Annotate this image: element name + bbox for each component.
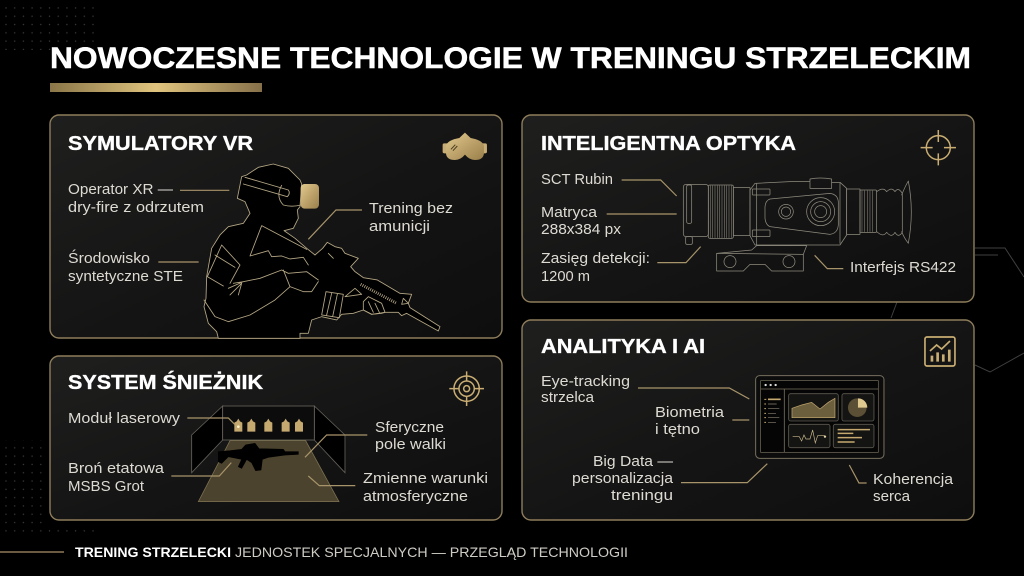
panel: symulatory VR xyxy=(50,115,502,338)
body xyxy=(750,178,847,245)
callout: Zmienne warunki atmosferyczne xyxy=(308,470,488,505)
callout: Zasięg detekcji: 1200 m xyxy=(541,268,590,285)
footer text: JEDNOSTEK SPECJALNYCH — PRZEGLĄD TECHNOLOGII xyxy=(235,544,628,560)
callout: Trening bez amunicji: Trening bez xyxy=(369,200,453,217)
callout: Zasięg detekcji: Zasięg detekcji: xyxy=(541,250,650,267)
callout: Broń etatowa MSBS Grot: MSBS Grot xyxy=(68,478,145,495)
callout: Moduł laserowy: Moduł laserowy xyxy=(68,410,181,427)
rifle silhouette xyxy=(218,443,298,471)
heartbeat xyxy=(793,430,825,443)
callout: Matryca: 288x384 px xyxy=(541,221,622,238)
icon: target xyxy=(449,371,484,406)
callout: SCT Rubin xyxy=(541,171,677,196)
eyepiece xyxy=(847,189,860,234)
callout: Big Data personalizacja treningu: Big Data — xyxy=(593,453,673,470)
callout: Zmienne warunki atmosferyczne: Zmienne warunki xyxy=(363,470,488,487)
callout: Matryca: Matryca xyxy=(541,204,598,221)
title: NOWOCZESNE TECHNOLOGIE W TRENINGU STRZELECKIM xyxy=(50,42,971,75)
callout: Eye-tracking strzelca: Eye-tracking xyxy=(541,373,630,390)
callout: Trening bez amunicji: amunicji xyxy=(369,218,430,235)
objective xyxy=(683,184,708,237)
thermal scope drawing xyxy=(683,178,911,271)
callout: Trening bez amunicji xyxy=(308,200,453,239)
soldier outline with rifle xyxy=(204,164,440,338)
callout: Biometria i tętno xyxy=(655,404,749,438)
pie chart xyxy=(848,398,867,417)
callout: Interfejs RS422 xyxy=(815,255,956,276)
callout: Koherencja serca: Koherencja xyxy=(873,471,954,488)
walls xyxy=(192,406,345,473)
callout: Zasięg detekcji xyxy=(541,247,701,285)
sidebar menu xyxy=(768,397,781,402)
callout: Operator XR: Operator XR — xyxy=(68,181,173,198)
callout: Broń etatowa MSBS Grot: Broń etatowa xyxy=(68,460,165,477)
callout: Sferyczne pole walki xyxy=(305,419,446,457)
heading: system Śnieżnik: SYSTEM ŚNIEŻNIK xyxy=(68,370,263,394)
icon: chart xyxy=(925,337,955,366)
callout: Interfejs RS422: Interfejs RS422 xyxy=(850,259,956,276)
gold VR visor xyxy=(301,184,319,209)
callout: Operator XR xyxy=(68,181,229,216)
dashboard tablet xyxy=(756,376,884,458)
callout: Sferyczne pole walki: pole walki xyxy=(375,436,446,453)
shooting range illustration xyxy=(192,406,345,502)
callout: Biometria i tętno: i tętno xyxy=(655,421,700,438)
callout: Biometria i tętno: Biometria xyxy=(655,404,725,421)
targets xyxy=(234,419,303,432)
panel: inteligentna optyka xyxy=(522,115,974,302)
mount xyxy=(717,246,807,271)
callout: Koherencja serca xyxy=(849,465,954,505)
callout: Środowisko syntetyczne STE: syntetyczne STE xyxy=(68,268,183,285)
panel: system Śnieżnik xyxy=(50,356,502,520)
heading: symulatory VR: SYMULATORY VR xyxy=(68,132,253,155)
icon: crosshair xyxy=(921,130,956,165)
callout: Matryca xyxy=(541,204,677,238)
bar list xyxy=(838,430,870,442)
tube xyxy=(733,188,750,236)
callout: Operator XR: dry-fire z odrzutem xyxy=(68,199,204,216)
callout: Środowisko syntetyczne STE xyxy=(68,249,199,285)
callout: Zmienne warunki atmosferyczne: atmosferyczne xyxy=(363,488,468,505)
focus ring xyxy=(708,185,733,238)
area chart xyxy=(792,398,835,418)
panel: analityka i AI xyxy=(522,320,974,520)
callout: SCT Rubin: SCT Rubin xyxy=(541,171,613,188)
floor xyxy=(198,441,339,502)
callout: Środowisko syntetyczne STE: Środowisko xyxy=(68,249,150,267)
callout: Eye-tracking strzelca: strzelca xyxy=(541,389,595,406)
callout: Eye-tracking strzelca xyxy=(541,373,749,406)
callout: Sferyczne pole walki: Sferyczne xyxy=(375,419,444,436)
heading: inteligentna optyka: INTELIGENTNA OPTYKA xyxy=(541,132,796,155)
callout: Big Data personalizacja treningu: treningu xyxy=(611,487,673,504)
gold title bar xyxy=(50,83,262,92)
callout: Big Data personalizacja treningu: personalizacja xyxy=(572,470,674,487)
footer rule xyxy=(0,551,64,553)
dashboard cards xyxy=(789,394,874,448)
footer text: TRENING STRZELECKI xyxy=(75,544,231,560)
callout: Big Data personalizacja treningu xyxy=(572,453,767,504)
callout: Koherencja serca: serca xyxy=(873,488,911,505)
heading: analityka i AI: ANALITYKA I AI xyxy=(541,335,705,358)
icon: VR goggles xyxy=(443,133,487,160)
callout: Broń etatowa MSBS Grot xyxy=(68,460,231,495)
callout: Moduł laserowy xyxy=(68,410,235,427)
